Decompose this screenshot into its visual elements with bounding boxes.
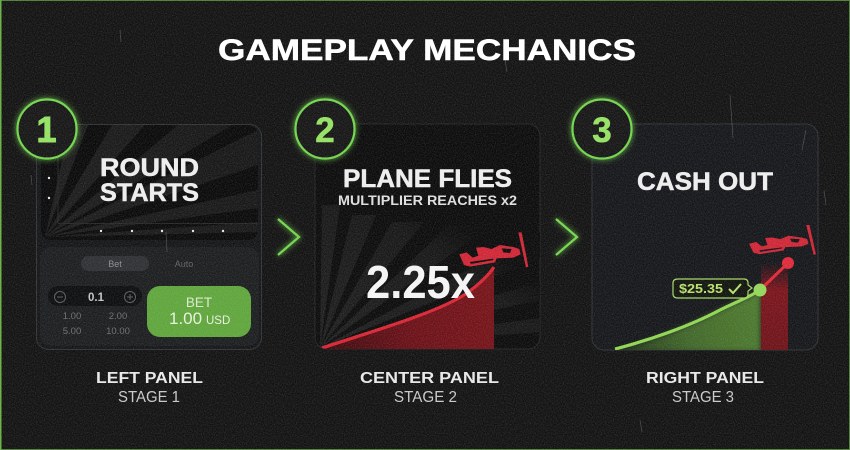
arrow 1 (278, 219, 299, 255)
chart area with rays (41, 125, 258, 240)
caption: left panel: STAGE 1 (118, 389, 180, 406)
callout: winnings (673, 279, 752, 298)
caption: left panel: LEFT PANEL (96, 370, 203, 387)
caption: left panel (96, 370, 203, 406)
caption: right panel (646, 370, 764, 406)
panel: right, cash out (592, 124, 818, 352)
heading: round starts: STARTS (100, 179, 199, 207)
heading: round starts: ROUND (100, 154, 199, 182)
caption: center panel: STAGE 2 (394, 389, 457, 406)
bet controls: 1.00 (169, 309, 202, 328)
bet controls: Auto (175, 259, 193, 269)
multiplier: 2.25x (366, 256, 475, 308)
badge 2 (296, 100, 354, 158)
red area under curve (322, 267, 494, 349)
icon: plane (749, 225, 816, 255)
bet controls: USD (206, 315, 230, 327)
panel: center, plane flies (315, 124, 540, 349)
badge 1 (18, 100, 76, 158)
caption: center panel: CENTER PANEL (360, 370, 499, 387)
badge 1: 1 (36, 109, 57, 150)
bet controls: 5.00 (63, 326, 81, 337)
chart areas (615, 262, 788, 352)
arrow 2 (556, 219, 577, 255)
panel: left, round starts (36, 124, 262, 350)
bet controls: BET (186, 295, 212, 310)
badge 2: 2 (315, 111, 335, 150)
caption: center panel (360, 370, 499, 406)
bet controls (40, 247, 259, 346)
caption: right panel: STAGE 3 (672, 389, 734, 406)
bet controls: 0.1 (88, 292, 105, 304)
bet controls: Bet (108, 259, 122, 269)
callout: winnings: $25.35 (679, 281, 723, 296)
rays (320, 205, 540, 348)
points (754, 284, 766, 296)
icon: plane (459, 232, 528, 268)
badge 3 (572, 100, 632, 158)
subheading: MULTIPLIER REACHES x2 (338, 193, 517, 208)
badge 3: 3 (592, 111, 612, 150)
heading: round starts (100, 154, 199, 207)
heading: cash out: CASH OUT (637, 168, 773, 196)
bet button (147, 286, 251, 337)
title: GAMEPLAY MECHANICS (218, 34, 636, 67)
bet controls: 2.00 (109, 311, 127, 322)
heading: plane flies: PLANE FLIES (343, 165, 512, 193)
bet controls: 10.00 (106, 326, 130, 337)
bet controls: 1.00 (63, 311, 81, 322)
axis dots (48, 177, 224, 232)
caption: right panel: RIGHT PANEL (646, 370, 764, 387)
